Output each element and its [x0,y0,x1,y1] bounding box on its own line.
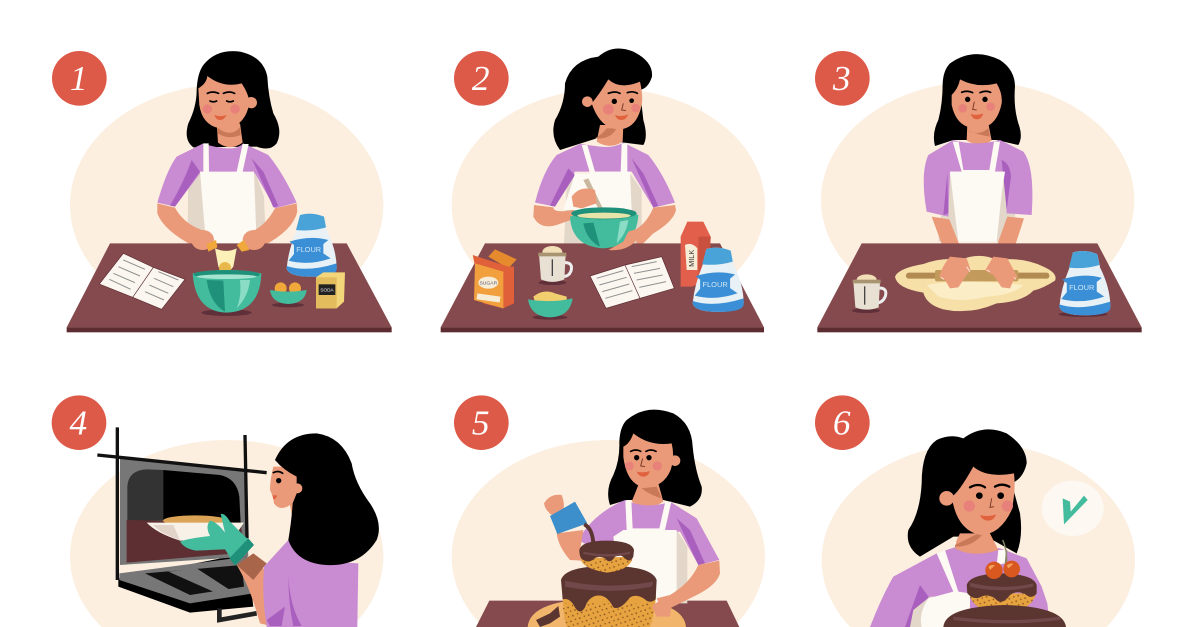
panel: step 5 pour chocolate icing [452,395,765,627]
measuring cup [538,246,572,285]
cake plate [528,598,686,627]
flour bag: FLOUR [702,280,728,289]
milk carton [681,222,711,287]
flour bag [693,248,744,312]
number badge 1 [52,51,107,106]
rolling pin [906,270,1049,281]
soda box [316,272,345,308]
woman cracking egg [157,51,297,246]
woman rolling dough [924,54,1032,267]
hands on rolling pin [939,257,1017,288]
panel: step 3 roll dough [815,51,1142,332]
woman from behind with oven mitt [180,433,379,627]
background ellipse [70,440,383,627]
measuring cup [852,274,886,313]
hand on plate [652,600,672,617]
butter bowl [528,291,573,320]
number badge 5: 5 [472,403,490,442]
panel: step 4 bake in oven [52,395,383,627]
background ellipse [70,84,383,326]
open recipe book [590,257,674,308]
table [67,243,392,332]
number badge 3: 3 [832,59,851,98]
mixing bowl [193,270,261,316]
number badge 6 [815,395,870,450]
panel: step 1 crack eggs [52,51,392,332]
number badge 5 [454,395,509,450]
milk carton: MILK [687,250,696,267]
number badge 3 [815,51,870,106]
oven [97,427,267,620]
hands holding egg [191,230,265,274]
background ellipse [452,440,765,627]
flour bag: FLOUR [1069,283,1095,292]
table [817,243,1142,332]
background ellipse [822,443,1135,627]
woman with cake [870,429,1050,627]
two tier chocolate cake [561,541,657,627]
chocolate pieces [536,606,560,627]
soda box: SODA [320,287,334,292]
flour bag [287,214,337,277]
dough [895,256,1056,311]
sugar box: SUGAR [479,280,498,286]
woman stirring [533,48,676,247]
background ellipse [821,82,1134,318]
number badge 2: 2 [472,59,490,98]
flour bag [1059,251,1110,317]
number badge 6: 6 [833,403,851,442]
number badge 4 [52,395,106,450]
check mark bubble [1042,481,1104,536]
table [476,601,739,627]
cake with cherries [943,540,1066,627]
flour bag: FLOUR [296,245,321,254]
woman pouring [544,410,720,612]
open recipe book [99,253,185,309]
panel: step 6 finished cake [815,395,1135,627]
panel: step 2 mix ingredients [441,48,765,332]
sugar box [473,249,517,308]
background ellipse [452,88,765,322]
table [441,243,764,332]
number badge 1: 1 [70,59,88,98]
egg bowl [270,282,307,307]
number badge 4: 4 [69,403,87,442]
number badge 2 [454,51,509,106]
dish with pie [147,515,244,541]
bowl and supporting hand [570,207,638,250]
